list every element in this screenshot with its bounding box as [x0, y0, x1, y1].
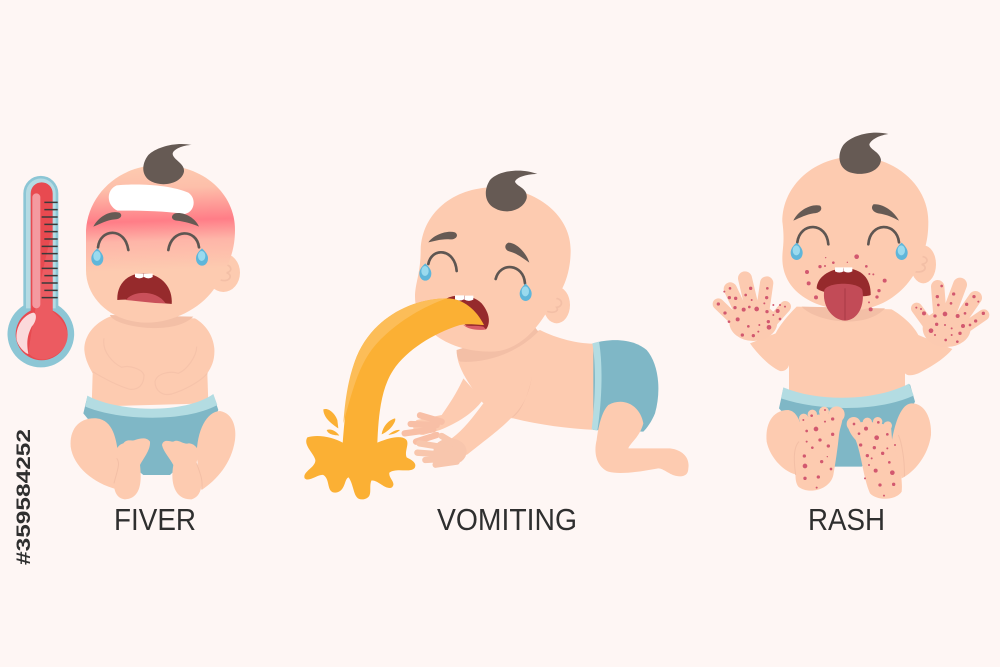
- neck and torso: [84, 317, 214, 407]
- left foot spots: [802, 409, 834, 489]
- closed eyes: [428, 252, 525, 283]
- neck shadow: [802, 307, 885, 321]
- bent leg: [595, 402, 689, 476]
- legs: [71, 411, 235, 490]
- closed eyes: [98, 233, 199, 250]
- feet: [794, 406, 904, 499]
- legs: [766, 403, 931, 478]
- right hand spots: [915, 285, 985, 343]
- crossed arms: [93, 338, 207, 394]
- body shading: [512, 377, 532, 417]
- diaper: [779, 384, 915, 467]
- left hand: [718, 278, 785, 341]
- tears: [419, 263, 532, 301]
- mouth with tongue out: [817, 267, 871, 321]
- forehead cloth: [109, 185, 194, 214]
- right hand: [917, 285, 984, 347]
- panel: rash baby: [717, 133, 985, 499]
- label: vomiting: VOMITING: [437, 502, 577, 537]
- right foot spots: [853, 421, 896, 497]
- neck shadow: [457, 325, 538, 362]
- head: [415, 187, 571, 352]
- eyebrows: [793, 204, 899, 221]
- label: fever: FIVER: [114, 502, 196, 537]
- panel: fever baby: [7, 144, 240, 499]
- ear: [543, 287, 570, 323]
- vomit splashes: [323, 409, 400, 436]
- hair: [143, 144, 192, 184]
- hair: [486, 171, 537, 211]
- stock number: #359584252: [14, 429, 35, 565]
- eyebrows: [93, 212, 199, 227]
- left hand spots: [717, 287, 786, 337]
- ear: [207, 253, 240, 292]
- mouth: [447, 295, 489, 330]
- eyebrows: [428, 232, 529, 263]
- front arm and hand: [417, 377, 532, 465]
- label: rash: RASH: [808, 502, 885, 537]
- face spots: [805, 254, 887, 311]
- head: [782, 157, 928, 310]
- tears: [91, 248, 208, 266]
- neck shadow: [110, 315, 193, 328]
- diaper: [592, 340, 658, 432]
- torso: [457, 330, 600, 430]
- hair: [839, 133, 888, 174]
- feet: [113, 438, 202, 499]
- panel: vomiting baby: [304, 171, 689, 499]
- vomit puddle: [304, 436, 415, 499]
- vomit stream: [343, 298, 484, 443]
- closed eyes: [797, 227, 899, 244]
- back arm and hand: [405, 378, 483, 442]
- ear: [911, 245, 936, 283]
- head with fever flush: [86, 165, 235, 323]
- diaper: [83, 394, 218, 475]
- torso with arms: [750, 307, 952, 398]
- crying mouth: [117, 273, 172, 304]
- rash spots: [717, 254, 985, 497]
- icon: thermometer: [7, 176, 74, 367]
- tears: [791, 243, 908, 260]
